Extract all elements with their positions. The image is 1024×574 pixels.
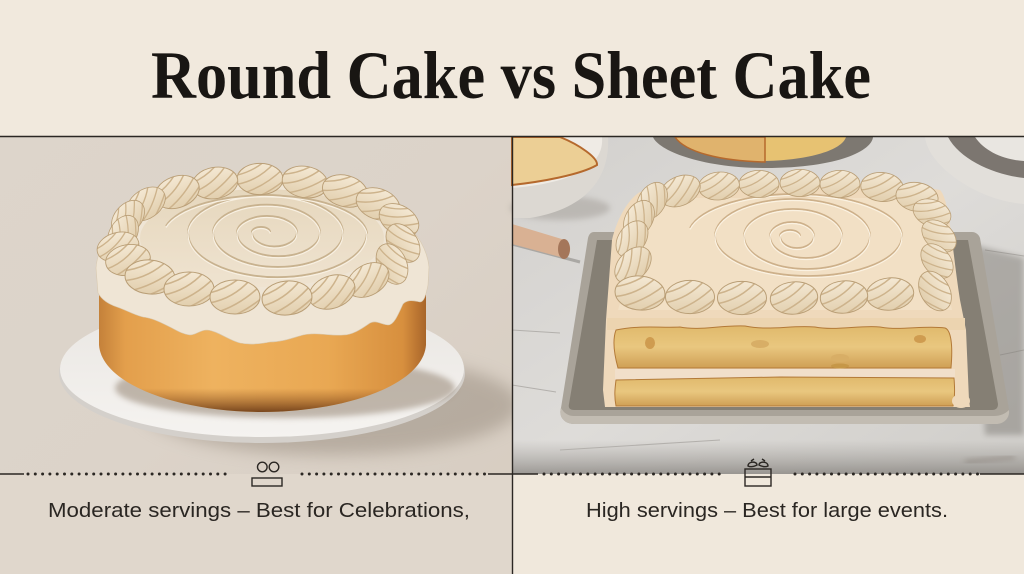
divider lines	[0, 136, 1024, 574]
plate and bowl right	[925, 137, 1024, 204]
sheet cake top sponge layer	[614, 326, 952, 368]
title: Round Cake vs Sheet Cake	[151, 37, 871, 113]
round cake icing	[96, 172, 429, 344]
round cake top surface	[140, 189, 384, 287]
spiral piping	[166, 195, 367, 277]
caption: sheet cake: High servings – Best for large events.	[586, 500, 948, 522]
sheet cake filling	[615, 369, 955, 380]
icing blob	[952, 394, 970, 408]
sheet cake bottom sponge layer	[615, 377, 955, 406]
sheet cake top surface	[607, 194, 965, 330]
caption: round cake: Moderate servings – Best for Celebrations,	[48, 500, 470, 522]
plate	[59, 301, 465, 443]
panel: sheet cake	[510, 137, 1024, 474]
bowl with cake slice	[510, 137, 610, 220]
panel: round cake	[0, 137, 520, 574]
sheet cake spiral	[690, 194, 902, 276]
round cake sponge	[99, 280, 426, 412]
tray shadow	[975, 245, 1024, 435]
cake shadow on plate	[115, 358, 455, 418]
icon: gift cake	[745, 459, 771, 486]
rolling pin handle	[512, 224, 580, 262]
sheet cake icing body	[603, 183, 970, 407]
round cake shell border	[92, 160, 431, 320]
sheet cake shell border	[605, 166, 966, 320]
plate shadow	[140, 355, 520, 455]
plate with cake	[653, 137, 873, 168]
title band	[0, 0, 1024, 136]
icon: people servings	[252, 462, 282, 486]
baking tray	[560, 232, 1009, 424]
caption band right	[512, 474, 1024, 574]
